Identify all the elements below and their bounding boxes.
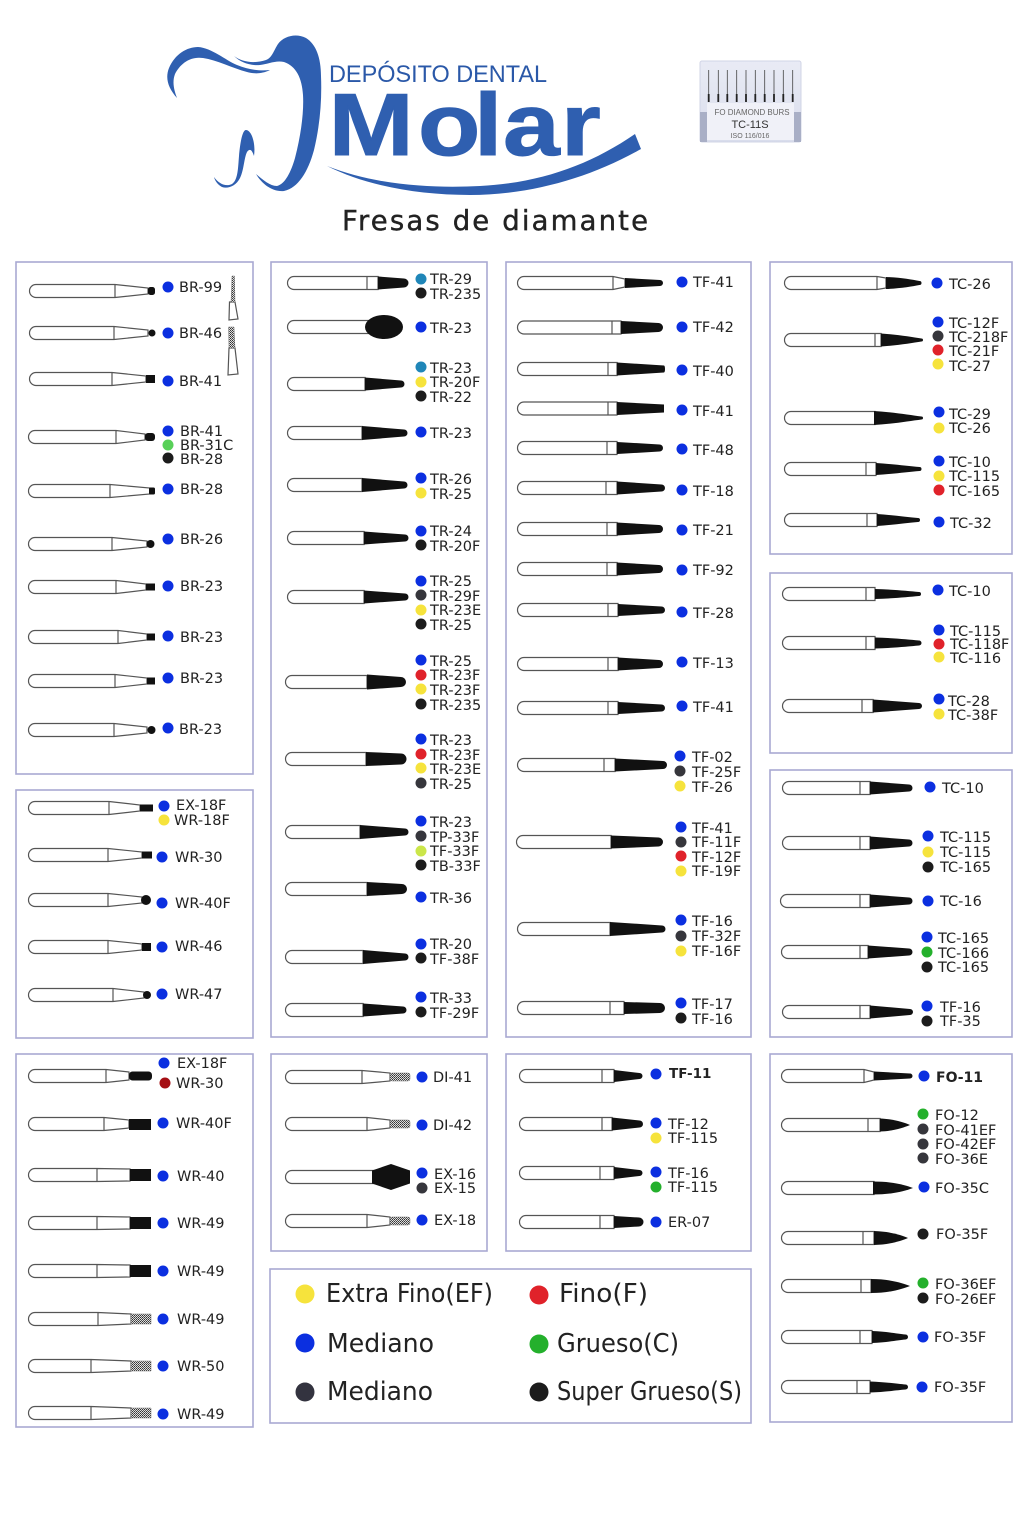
- bur group: TF-02 TF-25F TF-26: TF-02: [691, 750, 733, 766]
- bur: FO-35F: FO-35F: [934, 1380, 986, 1396]
- legend item: Extra Fino: Extra Fino(EF): [326, 1279, 493, 1309]
- bur group: TF-16 TF-115: [520, 1166, 718, 1196]
- bur group: TF-02 TF-25F TF-26: [518, 750, 741, 796]
- bur: WR-40F: WR-40F: [175, 896, 231, 912]
- bur group: TR-23 TR-20F TR-22: [288, 361, 480, 406]
- bur group: TR-33 TF-29F: [286, 991, 479, 1022]
- bur: TF-40: [518, 362, 734, 380]
- bur: FO-35C: FO-35C: [935, 1181, 989, 1197]
- bur group: EX-18F WR-18F: EX-18F: [176, 798, 226, 814]
- title: Fresas de diamante: [342, 205, 648, 237]
- icon: side bur detail 2: [228, 327, 238, 375]
- bur group: TR-25 TR-29F TR-23E TR-25: TR-25: [429, 574, 472, 590]
- bur group: TC-29 TC-26: TC-26: [948, 421, 991, 437]
- bur: WR-47: WR-47: [175, 987, 223, 1003]
- bur group: TR-25 TR-23F TR-23F TR-235: TR-23F: [429, 683, 480, 699]
- bur: TF-41: TF-41: [692, 700, 734, 716]
- bur: TC-16: TC-16: [939, 894, 982, 910]
- bur group: TR-25 TR-23F TR-23F TR-235: TR-25: [429, 654, 472, 670]
- bur: WR-49 diamond textured: [28, 1312, 225, 1328]
- bur group: TR-29 TR-235: TR-29: [429, 272, 472, 288]
- bur group: TF-17 TF-16: TF-16: [691, 1012, 733, 1028]
- bur group: TF-16 TF-32F TF-16F: TF-16F: [691, 944, 741, 960]
- bur group: TC-12F TC-218F TC-21F TC-27: TC-27: [948, 359, 991, 375]
- bur: TF-42: [518, 320, 734, 336]
- bur group: TF-41 TF-11F TF-12F TF-19F: TF-41: [691, 821, 733, 837]
- bur group: TR-20 TF-38F: TR-20: [429, 937, 472, 953]
- bur: WR-46: WR-46: [175, 939, 223, 955]
- bur group: TF-12 TF-115: TF-115: [667, 1131, 718, 1147]
- bur group: TR-26 TR-25: [288, 472, 472, 503]
- bur: WR-49: [28, 1216, 225, 1232]
- panel: TF series: [506, 262, 751, 1037]
- bur group: TR-25 TR-29F TR-23E TR-25: TR-25: [429, 618, 472, 634]
- bur group: FO-12 FO-41EF FO-42EF FO-36E: FO-12: [935, 1108, 979, 1124]
- bur: BR-23: [28, 630, 223, 646]
- bur: WR-49 diamond textured: WR-49: [177, 1407, 225, 1423]
- bur: BR-23: [28, 671, 223, 688]
- bur: TC-10: TC-10: [941, 781, 984, 797]
- bur: TF-92: [518, 562, 734, 579]
- bur: BR-23: BR-23: [180, 671, 223, 687]
- panel: WR cylinder series: [16, 1054, 253, 1427]
- bur group: FO-36EF FO-26EF: FO-36EF: [935, 1277, 996, 1293]
- panel: FO series: [770, 1054, 1012, 1422]
- bur: WR-50 diamond textured: WR-50: [177, 1359, 225, 1375]
- bur group: TF-41 TF-11F TF-12F TF-19F: TF-11F: [691, 835, 741, 851]
- legend item: Grueso: Grueso(C): [557, 1329, 679, 1359]
- bur: WR-49: WR-49: [177, 1264, 225, 1280]
- bur group: TF-16 TF-32F TF-16F: [518, 914, 741, 960]
- bur: ER-07: [520, 1215, 710, 1231]
- bur group: BR-41 BR-31C BR-28: [28, 424, 233, 468]
- bur group: TR-23 TR-23F TR-23E TR-25: TR-23F: [429, 748, 480, 764]
- bur group: TR-20 TF-38F: TF-38F: [429, 952, 479, 968]
- bur group: TF-16 TF-115: TF-115: [667, 1180, 718, 1196]
- bur group: TF-02 TF-25F TF-26: TF-26: [691, 780, 733, 796]
- legend item: Fino: Fino(F): [559, 1279, 648, 1309]
- bur: BR-23: BR-23: [179, 722, 222, 738]
- bur group: TC-28 TC-38F: TC-38F: [947, 708, 998, 724]
- bur group: EX-16 EX-15 hexagon head: [286, 1164, 476, 1197]
- bur: TF-18: [518, 482, 734, 500]
- bur: ER-07: ER-07: [668, 1215, 710, 1231]
- bur group: TC-165 TC-166 TC-165: [782, 931, 989, 976]
- bur: BR-99: BR-99: [179, 280, 222, 296]
- legend item: Mediano blue: Mediano: [327, 1329, 434, 1359]
- product photo: bur box TC-11S: TC-11S: [731, 119, 769, 131]
- bur: BR-23: BR-23: [180, 630, 223, 646]
- bur: BR-46: BR-46: [179, 326, 222, 342]
- bur: TC-32: [785, 514, 992, 532]
- bur: WR-40F: [28, 894, 231, 912]
- bur: TF-28: TF-28: [692, 606, 734, 622]
- bur group: TF-41 TF-11F TF-12F TF-19F: TF-19F: [691, 864, 741, 880]
- panel: TC series upper: [770, 262, 1012, 554]
- bur group: FO-12 FO-41EF FO-42EF FO-36E: [782, 1108, 996, 1168]
- bur group: FO-12 FO-41EF FO-42EF FO-36E: FO-42EF: [935, 1137, 996, 1153]
- bur group: TC-165 TC-166 TC-165: TC-166: [937, 946, 989, 962]
- bur: BR-23: [28, 579, 223, 595]
- bur: WR-49: [28, 1264, 225, 1280]
- bur: TF-13: TF-13: [692, 656, 734, 672]
- bur group: TC-10 TC-115 TC-165: TC-115: [948, 469, 1000, 485]
- bur: WR-40: WR-40: [177, 1169, 225, 1185]
- bur group: TC-115 TC-115 TC-165: TC-115: [939, 830, 991, 846]
- bur: TF-28: [518, 604, 734, 622]
- bur group: TR-24 TR-20F: TR-24: [429, 524, 472, 540]
- product photo: bur box TC-11S: FO DIAMOND BURS: [714, 108, 790, 117]
- bur group: EX-18F WR-30: EX-18F: [177, 1056, 227, 1072]
- bur: BR-41: BR-41: [179, 374, 222, 390]
- bur group: TC-115 TC-118F TC-116: TC-115: [949, 624, 1001, 640]
- bur group: EX-16 EX-15 hexagon head: EX-16: [434, 1167, 476, 1183]
- bur group: EX-18F WR-18F: [28, 798, 230, 829]
- bur: FO-35F: FO-35F: [936, 1227, 988, 1243]
- bur: TR-36: [286, 882, 472, 907]
- bur: EX-18: [286, 1213, 476, 1229]
- bur group: TC-115 TC-118F TC-116: TC-116: [949, 651, 1001, 667]
- bur: DI-41: [286, 1070, 472, 1086]
- bur: BR-99: [30, 280, 222, 298]
- bur group: TF-12 TF-115: TF-12: [667, 1117, 709, 1133]
- bur: TF-40: TF-40: [692, 364, 734, 380]
- panel: TF and ER small series: [506, 1054, 751, 1251]
- panel: BR series: [16, 262, 253, 774]
- bur group: TF-16 TF-32F TF-16F: TF-32F: [691, 929, 741, 945]
- bur group: BR-41 BR-31C BR-28: BR-28: [180, 452, 223, 468]
- bur: WR-40F: WR-40F: [176, 1116, 232, 1132]
- bur group: TC-10 TC-115 TC-165: TC-10: [948, 455, 991, 471]
- panel: EX and WR series: [16, 790, 253, 1038]
- icon: tooth outline: [167, 36, 321, 191]
- bur: DI-42: [286, 1118, 472, 1134]
- bur: BR-28: BR-28: [180, 482, 223, 498]
- panel: TC series middle: [770, 573, 1012, 753]
- bur group: TC-12F TC-218F TC-21F TC-27: TC-12F: [948, 316, 999, 332]
- bur: TR-23 football: TR-23: [429, 321, 472, 337]
- bur: TC-10: [783, 781, 984, 797]
- bur: TF-42: TF-42: [692, 320, 734, 336]
- bur group: FO-12 FO-41EF FO-42EF FO-36E: FO-36E: [935, 1152, 988, 1168]
- bur group: TF-17 TF-16: [518, 997, 733, 1028]
- bur: BR-46: [30, 326, 222, 342]
- bur: TC-32: TC-32: [949, 516, 992, 532]
- bur group: TF-16 TF-35: TF-35: [939, 1014, 981, 1030]
- product photo: bur box TC-11S: [700, 61, 801, 142]
- logo text: Molar: Molar: [329, 77, 601, 174]
- bur group: TR-29 TR-235: TR-235: [429, 287, 481, 303]
- bur: TR-23 football: [288, 315, 472, 339]
- bur: TC-26: [785, 276, 991, 293]
- bur group: TR-23 TR-20F TR-22: TR-22: [429, 390, 472, 406]
- bur group: TR-24 TR-20F: [288, 524, 480, 555]
- bur: WR-49 diamond textured: [28, 1406, 225, 1423]
- bur group: TC-165 TC-166 TC-165: TC-165: [937, 931, 989, 947]
- bur group: TC-29 TC-26: [785, 406, 991, 437]
- bur group: TC-12F TC-218F TC-21F TC-27: TC-218F: [948, 330, 1008, 346]
- bur group: TR-23 TP-33F TF-33F TB-33F: TB-33F: [429, 859, 481, 875]
- bur group: TR-23 TR-23F TR-23E TR-25: TR-23: [429, 733, 472, 749]
- bur group: TR-23 TP-33F TF-33F TB-33F: TF-33F: [429, 844, 479, 860]
- bur group: TR-26 TR-25: TR-25: [429, 487, 472, 503]
- bur: WR-40: [28, 1168, 225, 1185]
- panel: TR series: [271, 262, 487, 1037]
- legend item: Mediano dark: Mediano: [327, 1377, 433, 1407]
- bur group: TR-23 TR-20F TR-22: TR-20F: [429, 375, 480, 391]
- bur group: TF-16 TF-32F TF-16F: TF-16: [691, 914, 733, 930]
- bur: FO-11: [782, 1070, 983, 1086]
- bur group: TR-25 TR-29F TR-23E TR-25: TR-29F: [429, 589, 480, 605]
- bur group: FO-36EF FO-26EF: [782, 1277, 996, 1308]
- bur: EX-18: EX-18: [434, 1213, 476, 1229]
- bur: BR-28: [28, 482, 223, 498]
- bur: FO-35F: FO-35F: [934, 1330, 986, 1346]
- bur: TR-23: [288, 426, 472, 442]
- icon: logo swoosh: [327, 134, 641, 195]
- bur group: EX-18F WR-30: WR-30: [176, 1076, 224, 1092]
- bur group: TR-23 TR-23F TR-23E TR-25: TR-23E: [429, 762, 481, 778]
- bur group: TC-10 TC-115 TC-165: [785, 455, 1000, 500]
- bur: DI-41: DI-41: [433, 1070, 472, 1086]
- bur: FO-35F: [782, 1227, 988, 1245]
- bur group: TC-115 TC-118F TC-116: TC-118F: [949, 637, 1009, 653]
- bur: WR-49 diamond textured: WR-49: [177, 1312, 225, 1328]
- bur group: TR-29 TR-235: [288, 272, 481, 303]
- bur group: TC-165 TC-166 TC-165: TC-165: [937, 960, 989, 976]
- bur group: TC-10 TC-115 TC-165: TC-165: [948, 484, 1000, 500]
- bur: TC-26: TC-26: [948, 277, 991, 293]
- bur: BR-26: [28, 532, 223, 550]
- bur group: TR-24 TR-20F: TR-20F: [429, 539, 480, 555]
- legend: grit colours: [270, 1269, 751, 1423]
- bur: TF-92: TF-92: [692, 563, 734, 579]
- bur: WR-40F: [28, 1116, 232, 1132]
- bur group: FO-12 FO-41EF FO-42EF FO-36E: FO-41EF: [935, 1123, 996, 1139]
- bur group: TR-25 TR-23F TR-23F TR-235: TR-235: [429, 698, 481, 714]
- panel: DI and EX series: [271, 1054, 487, 1251]
- bur: TF-41: [518, 275, 734, 291]
- bur group: TC-28 TC-38F: [783, 694, 998, 724]
- bur group: TR-23 TR-23F TR-23E TR-25: TR-25: [429, 777, 472, 793]
- bur: FO-11: FO-11: [936, 1070, 983, 1086]
- bur group: TF-16 TF-115: TF-16: [667, 1166, 709, 1182]
- bur group: TR-23 TP-33F TF-33F TB-33F: TP-33F: [429, 830, 479, 846]
- bur group: TC-28 TC-38F: TC-28: [947, 694, 990, 710]
- bur group: BR-41 BR-31C BR-28: BR-31C: [180, 438, 233, 454]
- bur: WR-50 diamond textured: [28, 1359, 225, 1375]
- bur group: TF-41 TF-11F TF-12F TF-19F: TF-12F: [691, 850, 741, 866]
- bur group: TR-23 TR-23F TR-23E TR-25: [286, 733, 481, 793]
- bur group: TR-25 TR-23F TR-23F TR-235: TR-23F: [429, 668, 480, 684]
- bur: BR-26: BR-26: [180, 532, 223, 548]
- bur: TF-11: [520, 1066, 711, 1082]
- bur group: TC-115 TC-118F TC-116: [783, 624, 1009, 667]
- bur group: TR-20 TF-38F: [286, 937, 479, 968]
- bur: TF-21: TF-21: [692, 523, 734, 539]
- bur group: TC-12F TC-218F TC-21F TC-27: [785, 316, 1008, 375]
- bur group: TR-26 TR-25: TR-26: [429, 472, 472, 488]
- bur: TC-16: [780, 894, 982, 910]
- bur group: TF-16 TF-35: TF-16: [939, 1000, 981, 1016]
- bur group: TC-115 TC-115 TC-165: TC-115: [939, 845, 991, 861]
- bur: FO-35F: [782, 1380, 986, 1396]
- bur group: TR-33 TF-29F: TR-33: [429, 991, 472, 1007]
- bur: TF-13: [518, 656, 734, 672]
- bur group: TR-23 TR-20F TR-22: TR-23: [429, 361, 472, 377]
- bur: WR-46: [28, 939, 223, 955]
- bur: TF-41: [518, 700, 734, 716]
- bur: BR-23: [28, 722, 222, 738]
- bur group: TC-115 TC-115 TC-165: TC-165: [939, 860, 991, 876]
- bur: TC-10: TC-10: [948, 584, 991, 600]
- bur group: BR-41 BR-31C BR-28: BR-41: [180, 424, 223, 440]
- product photo: bur box TC-11S: ISO 116/016: [731, 133, 769, 140]
- bur: WR-47: [28, 987, 223, 1003]
- legend item: Super Grueso: Super Grueso(S): [557, 1377, 742, 1407]
- bur group: FO-36EF FO-26EF: FO-26EF: [935, 1292, 996, 1308]
- bur: TC-10: [783, 584, 991, 600]
- bur: DI-42: DI-42: [433, 1118, 472, 1134]
- bur group: EX-18F WR-18F: WR-18F: [174, 813, 230, 829]
- logo text: DEPOSITO DENTAL: DEPÓSITO DENTAL: [329, 61, 547, 88]
- bur: TF-48: [518, 442, 734, 459]
- logo: Deposito Dental Molar: [167, 36, 641, 195]
- bur: TF-18: TF-18: [692, 484, 734, 500]
- bur: WR-30: [28, 848, 223, 866]
- bur group: EX-16 EX-15 hexagon head: EX-15: [434, 1181, 476, 1197]
- bur: BR-41: [30, 372, 222, 390]
- bur: TF-41: [518, 402, 734, 420]
- bur: WR-49: WR-49: [177, 1216, 225, 1232]
- bur: TR-23: TR-23: [429, 426, 472, 442]
- bur group: EX-18F WR-30: [28, 1056, 227, 1092]
- bur group: TF-41 TF-11F TF-12F TF-19F: [516, 821, 741, 880]
- bur: FO-35F: [782, 1330, 986, 1346]
- bur group: TF-16 TF-35: [783, 1000, 981, 1030]
- bur group: TC-12F TC-218F TC-21F TC-27: TC-21F: [948, 344, 999, 360]
- bur group: TR-33 TF-29F: TF-29F: [429, 1006, 479, 1022]
- bur group: TF-17 TF-16: TF-17: [691, 997, 733, 1013]
- bur group: TR-25 TR-29F TR-23E TR-25: TR-23E: [429, 603, 481, 619]
- bur: TF-41: TF-41: [692, 404, 734, 420]
- icon: side bur detail 1: [229, 276, 238, 320]
- bur: BR-23: BR-23: [180, 579, 223, 595]
- panel: TC series lower: [770, 770, 1012, 1037]
- bur: WR-30: WR-30: [175, 850, 223, 866]
- bur group: TR-23 TP-33F TF-33F TB-33F: [286, 815, 481, 875]
- bur: TF-21: [518, 522, 734, 539]
- bur group: TR-23 TP-33F TF-33F TB-33F: TR-23: [429, 815, 472, 831]
- bur group: TF-12 TF-115: [520, 1117, 718, 1147]
- bur: TF-48: TF-48: [692, 443, 734, 459]
- bur: TF-41: TF-41: [692, 275, 734, 291]
- bur group: TR-25 TR-23F TR-23F TR-235: [286, 654, 481, 714]
- bur group: TC-115 TC-115 TC-165: [783, 830, 991, 876]
- bur: TF-11: TF-11: [669, 1066, 711, 1082]
- bur group: TR-25 TR-29F TR-23E TR-25: [288, 574, 481, 634]
- bur: TR-36: TR-36: [429, 891, 472, 907]
- bur: FO-35C: [782, 1181, 989, 1197]
- bur group: TC-29 TC-26: TC-29: [948, 407, 991, 423]
- bur group: TF-02 TF-25F TF-26: TF-25F: [691, 765, 741, 781]
